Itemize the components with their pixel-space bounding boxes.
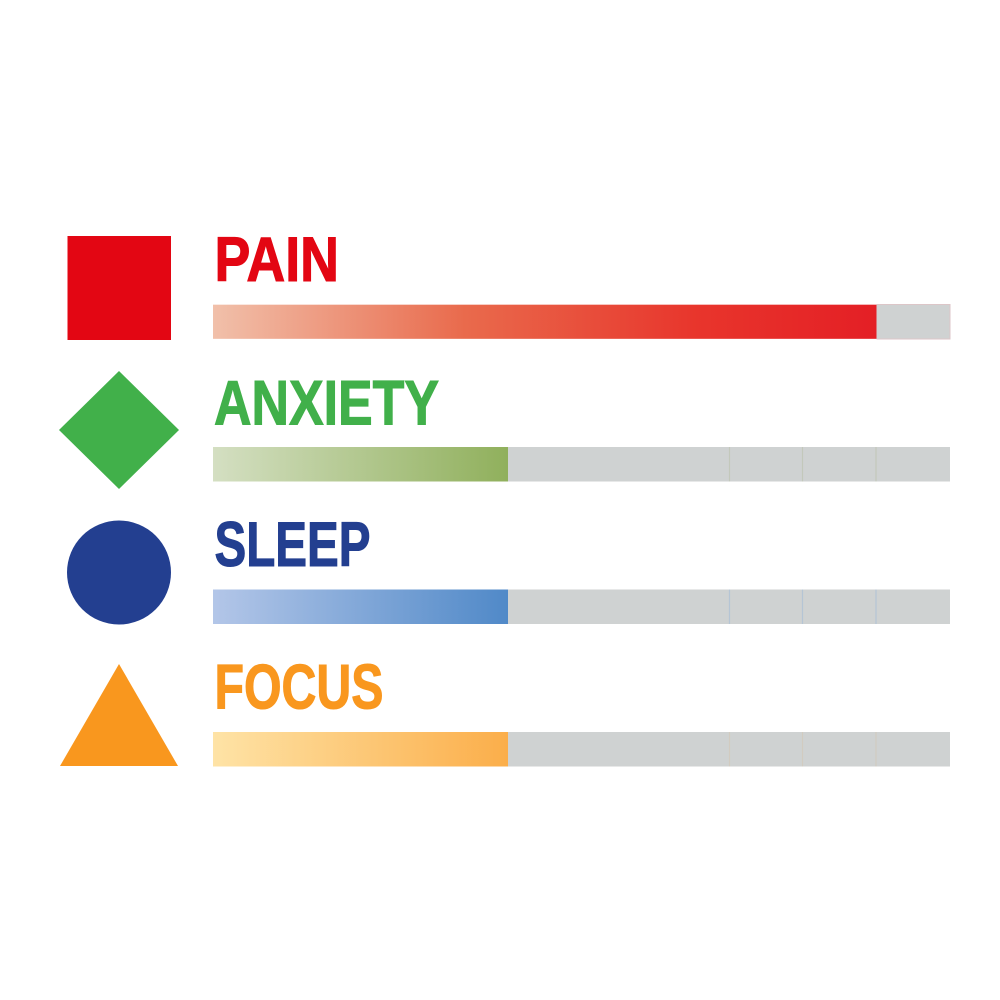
icon: orange triangle [60, 664, 178, 766]
bar: focus level [213, 732, 950, 766]
bar: sleep level [213, 590, 950, 624]
heading: SLEEP: SLEEP [214, 510, 370, 580]
bar: pain level [213, 304, 950, 339]
heading: ANXIETY: ANXIETY [214, 368, 439, 438]
row: pain [68, 225, 950, 340]
bar: anxiety level [213, 447, 950, 482]
row: anxiety [59, 368, 950, 489]
icon: red square [68, 236, 171, 340]
heading: PAIN: PAIN [214, 225, 339, 295]
heading: FOCUS: FOCUS [214, 652, 384, 722]
row: focus [60, 652, 950, 766]
icon: blue circle [67, 520, 171, 624]
row: sleep [67, 510, 950, 624]
icon: green diamond [59, 371, 179, 489]
